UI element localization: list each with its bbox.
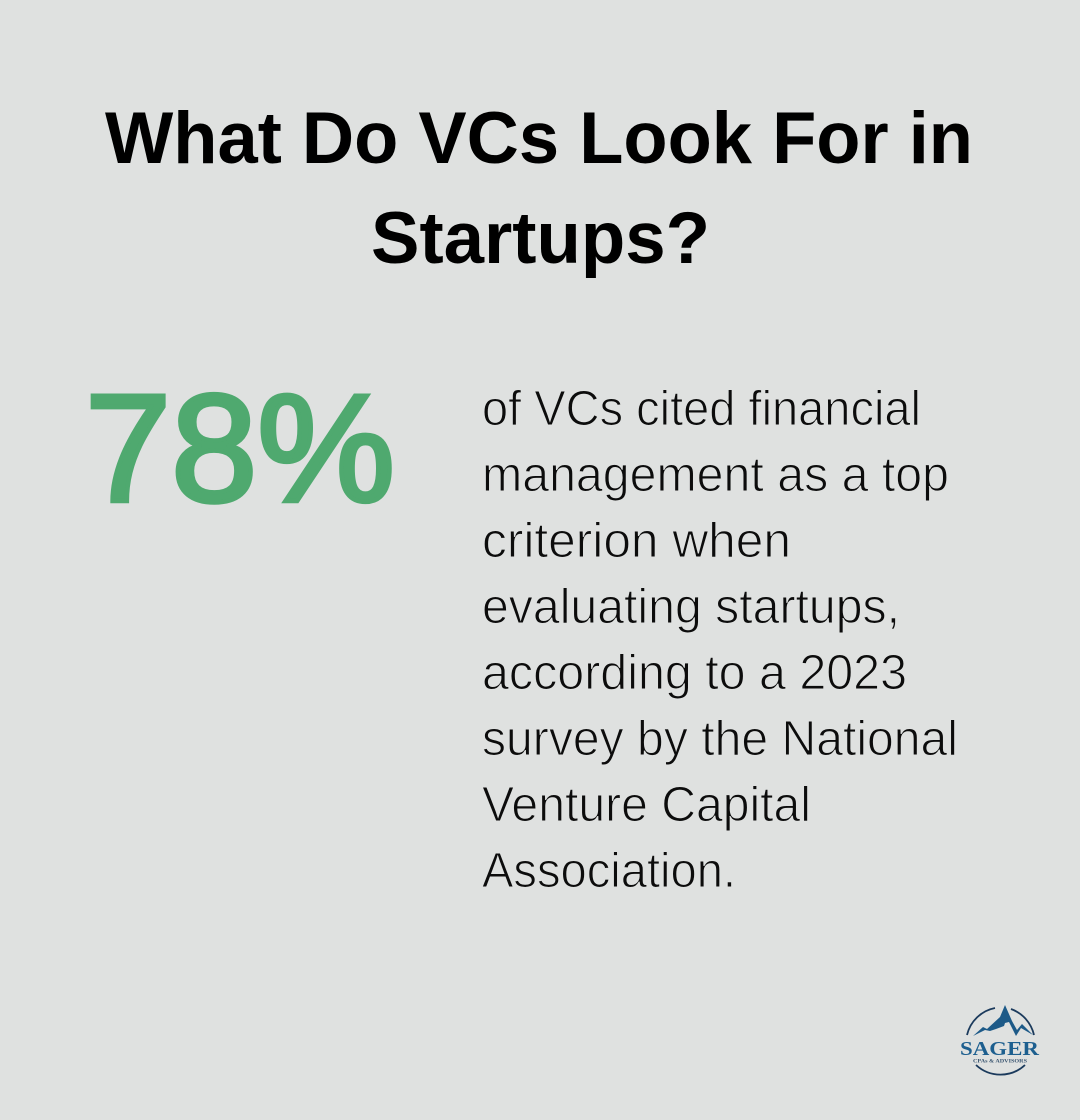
description text: survey by the National [482,711,958,766]
logo mountains [973,1005,1033,1036]
description text: Association. [482,843,736,898]
title: What Do VCs Look For in [105,98,973,179]
description text: according to a 2023 [482,645,907,700]
logo tagline: CPAs & ADVISORS [973,1060,1027,1064]
logo ring [967,1008,1034,1075]
title [105,98,973,279]
logo wordmark: SAGER [960,1038,1039,1060]
description text: management as a top [482,447,949,502]
description text: evaluating startups, [482,579,900,634]
description text [482,381,958,898]
description text: criterion when [482,513,791,568]
description text: Venture Capital [482,777,811,832]
big statistic: 78%: 78% [85,363,395,534]
title: Startups? [371,198,710,279]
logo: Sager CPAs & Advisors [960,1005,1039,1075]
description text: of VCs cited financial [482,381,921,436]
